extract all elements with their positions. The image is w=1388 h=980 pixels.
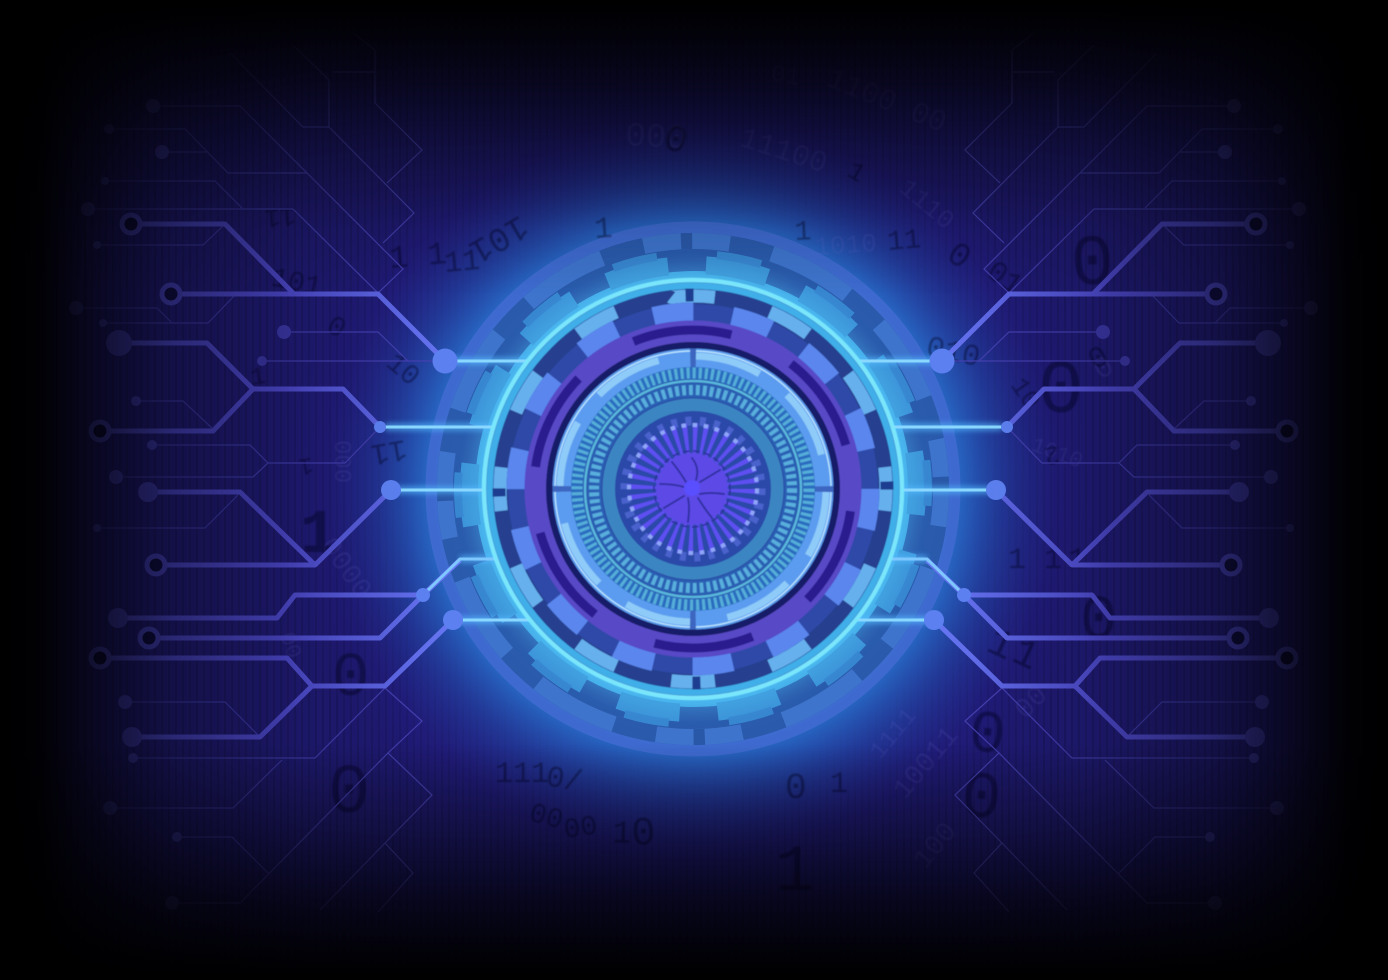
binary digits: dark: 11 [368,430,409,470]
main ring glow [480,276,906,702]
teal inner ring [490,286,896,692]
tile notches [492,288,894,690]
outer gear rim [426,222,960,756]
binary digits: dark: 0/ [543,761,585,801]
binary digits: dark: 0 [659,118,692,165]
circuit traces: left side [69,33,529,912]
teal divider [585,381,801,597]
binary digits: dark: 0 [332,643,369,714]
binary digits: dark: 010 [923,332,983,376]
hub cracks [660,458,724,522]
gear band base [517,313,869,665]
binary digits: dark: 1 [830,768,848,802]
binary digits: faint: 000 [624,118,688,159]
binary digits: dark: 0 [966,701,1008,772]
binary digits: dark: 01 [979,255,1028,304]
binary digits: dark: 0 [958,760,1004,838]
tick ring base [594,390,792,588]
binary digits: dark: 0 [1080,586,1117,657]
binary digits: faint: 00 [273,629,306,662]
binary digits: faint: 11100 [735,122,831,182]
binary digits: dark: 0 [630,812,657,858]
outer bright ring [484,280,902,698]
white hairlines [555,351,831,627]
pale band [560,356,826,622]
binary digits: dark: 0 [1069,223,1116,307]
outer gear tooth tips [431,227,955,751]
binary digits: faint: 1100 00 [821,63,951,141]
gear teeth [516,312,870,666]
outer gear [399,195,987,783]
dark arc bars [486,282,900,696]
binary digits: dark: 1 [249,364,268,393]
rosette hub [656,453,728,525]
binary digits: dark: 10 [379,348,425,393]
rosette disk [615,411,771,567]
binary digits: dark: 11 [886,225,922,259]
circuit traces: right side [858,33,1318,912]
binary digits: dark: 1 1 [1008,544,1062,578]
binary digits: dark [249,118,1117,910]
chevron ring marks [577,373,809,605]
binary digits: dark: 0 [1038,349,1084,435]
teal ring [609,405,777,573]
binary digits: dark: 111 [495,758,549,792]
binary digits: dark: 1 [1068,544,1086,578]
binary digits: dark: 10 [1003,372,1046,415]
binary digits: dark: 00 [562,812,600,847]
binary digits: faint: 1010 [813,229,878,263]
outer gear light segments [401,197,985,781]
binary digits: faint: 01 [769,61,802,93]
hub centre [684,480,700,496]
chevron ring base [577,373,809,605]
binary digits: dark: 1 [296,450,315,479]
binary digits: faint: 00 [1009,681,1055,726]
spoke tips [629,425,757,553]
central glow [263,59,1123,919]
binary digits: dark: 0 [1083,340,1116,379]
rosette blocks [625,421,761,557]
binary digits: faint: 1110 [893,173,960,236]
binary digits: faint: 1111 [865,704,923,765]
binary digits: dark: 1 [980,621,1020,672]
dial base [485,281,901,697]
binary digits: dark: 101 [461,205,534,269]
binary digits: dark: 1 1 [388,236,448,278]
binary digits: faint: 100 [908,817,964,876]
central gear dial [479,275,907,703]
outer gear teeth [435,231,951,747]
outer gear notches [434,230,952,748]
hub outline [654,451,730,527]
binary digits: dark: 1 [300,500,337,571]
binary digits: dark: 11 [443,245,482,282]
binary digits: dark: 1 [842,156,871,190]
band notches [559,355,827,623]
binary digits: faint [273,61,1121,876]
binary digits: dark: 0 [320,311,351,346]
binary digits: dark: 1 [611,815,633,853]
rosette spokes [645,441,741,537]
tick ring marks [594,390,792,588]
binary digits: dark: 1 [775,835,815,910]
binary digits: dark: 1 [794,217,812,249]
binary digits: dark: 11 [263,200,297,233]
outer gear dark body [450,246,936,732]
binary digits: dark: 0 [328,755,370,834]
binary digits: faint: 10011 [888,721,966,806]
light blue band [562,358,824,620]
binary digits: dark: 101 [268,263,324,304]
purple ring [536,332,850,646]
binary digits: faint: 0 [1088,350,1121,389]
light gear tiles [479,275,907,703]
binary digits: dark: 1 [1005,631,1045,682]
binary digits: dark: 0 [939,236,977,279]
binary digits: dark: 00 [526,799,566,837]
dark inner ring [550,346,836,632]
dark gear band [505,301,881,677]
binary digits: faint: 0000 [313,532,377,605]
binary digits: faint: 000 [327,440,354,483]
binary digits: dark: 1 [593,213,614,248]
binary digits: dark: 0 [785,768,807,809]
binary digits: dark: 2 [1042,438,1062,470]
binary digits: faint: 1010 [1028,433,1086,475]
